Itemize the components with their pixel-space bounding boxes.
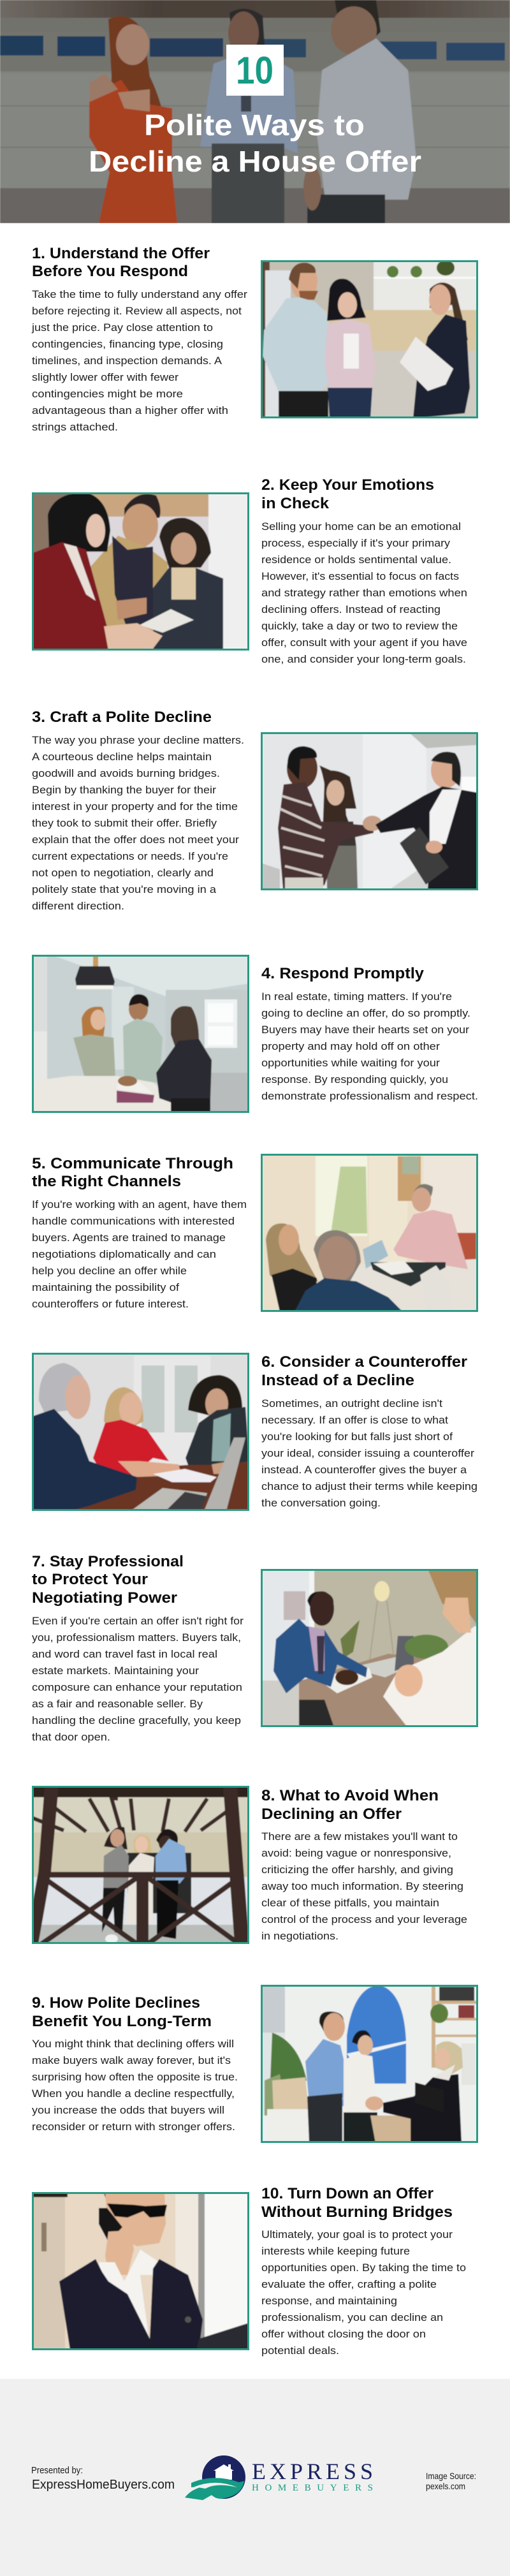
header photo: three people talking in front of a garage bbox=[0, 0, 510, 223]
text block: tip 2: However, it's essential to focus on facts bbox=[261, 571, 459, 582]
text block: tip 9: make buyers walk away forever, but it's bbox=[32, 2055, 231, 2066]
text block: tip 8: avoid: being vague or nonresponsive, bbox=[261, 1848, 451, 1859]
text block: tip 3: not open to negotiation, clearly and bbox=[32, 867, 214, 879]
text block: tip 7 bbox=[32, 1616, 244, 1743]
text block: tip 3: interest in your property and for the time bbox=[32, 801, 238, 813]
panel: tip 5 bbox=[32, 1154, 478, 1312]
heading: tip 6 bbox=[261, 1353, 467, 1389]
text block: tip 1 bbox=[31, 289, 248, 433]
photo: agent meeting a couple at a table bbox=[261, 1154, 478, 1312]
logo: Express HomeBuyers: EXPRESS bbox=[252, 2459, 373, 2484]
heading: tip 1 bbox=[32, 245, 210, 280]
text block: tip 8: control of the process and your leverage bbox=[261, 1914, 467, 1925]
text block: tip 5: counteroffers or future interest. bbox=[32, 1299, 189, 1310]
presented by credit: ExpressHomeBuyers.com bbox=[32, 2478, 175, 2492]
photo: handshake between agent and couple bbox=[261, 732, 478, 890]
heading: tip 9: Benefit You Long-Term bbox=[32, 2013, 212, 2030]
title: Decline a House Offer bbox=[89, 145, 421, 178]
text block: tip 4: demonstrate professionalism and respect. bbox=[261, 1091, 478, 1102]
text block: tip 10: response, and maintaining bbox=[261, 2295, 397, 2307]
text block: tip 5: negotiations diplomatically and can bbox=[32, 1249, 216, 1260]
panel: tip 3 bbox=[32, 709, 478, 912]
heading: tip 10: 10. Turn Down an Offer bbox=[261, 2185, 433, 2202]
text block: tip 9: reconsider or return with stronger offers. bbox=[32, 2121, 235, 2133]
heading: tip 10 bbox=[261, 2185, 453, 2221]
text block: tip 3: A courteous decline helps maintain bbox=[32, 751, 212, 763]
text block: tip 2: process, especially if it's your primary bbox=[261, 538, 451, 549]
panel: tip 10 bbox=[32, 2185, 466, 2357]
heading: tip 2: 2. Keep Your Emotions bbox=[261, 476, 434, 494]
heading: tip 10: Without Burning Bridges bbox=[261, 2204, 453, 2221]
text block: tip 3: Begin by thanking the buyer for their bbox=[32, 784, 217, 796]
heading: tip 7: to Protect Your bbox=[32, 1571, 148, 1588]
number badge: 10 bbox=[236, 49, 273, 92]
text block: tip 2: offer, consult with your agent if you have bbox=[261, 637, 467, 649]
text block: tip 10: potential deals. bbox=[261, 2345, 339, 2357]
panel: tip 4 bbox=[32, 955, 478, 1113]
presented by credit: Presented by: bbox=[31, 2466, 83, 2476]
panel: tip 1 bbox=[31, 245, 478, 433]
text block: tip 5: If you're working with an agent, have them bbox=[32, 1199, 247, 1211]
text block: tip 4: Buyers may have their hearts set on your bbox=[261, 1024, 470, 1036]
text block: tip 3: politely state that you're moving in a bbox=[32, 884, 217, 895]
text block: tip 7: composure can enhance your reputation bbox=[32, 1682, 242, 1693]
text block: tip 1: advantageous than a higher offer with bbox=[32, 405, 228, 416]
text block: tip 6: instead. A counteroffer gives the buyer a bbox=[261, 1464, 467, 1476]
text block: tip 3: The way you phrase your decline matters. bbox=[32, 735, 244, 746]
text block: tip 4 bbox=[261, 991, 478, 1102]
text block: tip 10: professionalism, you can decline an bbox=[261, 2312, 443, 2323]
heading: tip 4: 4. Respond Promptly bbox=[261, 965, 424, 982]
text block: tip 7: that door open. bbox=[32, 1732, 110, 1743]
text block: tip 2 bbox=[261, 521, 467, 665]
text block: tip 10: Ultimately, your goal is to protect your bbox=[261, 2229, 453, 2241]
text block: tip 2: and strategy rather than emotions when bbox=[261, 587, 467, 599]
heading: tip 7: Negotiating Power bbox=[32, 1589, 177, 1607]
text block: tip 7: you, professionalism matters. Buyers talk, bbox=[32, 1632, 241, 1644]
text block: tip 4: going to decline an offer, do so promptly. bbox=[261, 1008, 470, 1019]
heading: tip 2: in Check bbox=[261, 495, 329, 512]
text block: tip 10: offer without closing the door on bbox=[261, 2329, 426, 2340]
image source credit: Image Source: bbox=[426, 2471, 476, 2481]
text block: tip 8: in negotiations. bbox=[261, 1931, 339, 1942]
photo: agent with a couple in a kitchen bbox=[261, 260, 478, 418]
panel: tip 7 bbox=[32, 1553, 478, 1743]
text block: tip 9: When you handle a decline respectfully, bbox=[32, 2088, 235, 2100]
text block: tip 2: declining offers. Instead of reacting bbox=[261, 604, 441, 615]
text block: tip 4: response. By responding quickly, you bbox=[261, 1074, 448, 1086]
text block: tip 10: interests while keeping future bbox=[261, 2246, 410, 2257]
text block: tip 7: Even if you're certain an offer isn't right for bbox=[32, 1616, 244, 1627]
text block: tip 10: opportunities open. By taking the time to bbox=[261, 2262, 466, 2274]
text block: tip 5: buyers. Agents are trained to manage bbox=[32, 1232, 226, 1244]
image source credit: pexels.com bbox=[426, 2481, 465, 2491]
center man bbox=[229, 9, 265, 64]
heading: tip 7 bbox=[32, 1553, 184, 1607]
heading: tip 5 bbox=[32, 1155, 233, 1190]
text block: tip 8 bbox=[261, 1831, 467, 1942]
text block: tip 5: handle communications with interested bbox=[32, 1216, 235, 1227]
text block: tip 8: criticizing the offer harshly, and giving bbox=[261, 1864, 453, 1876]
text block: tip 1: before rejecting it. Review all aspects, not bbox=[32, 305, 242, 317]
text block: tip 6: chance to adjust their terms while keeping bbox=[261, 1481, 477, 1492]
text block: tip 2: Selling your home can be an emotional bbox=[261, 521, 461, 533]
heading: tip 6: Instead of a Decline bbox=[261, 1372, 414, 1389]
heading: tip 3: 3. Craft a Polite Decline bbox=[32, 709, 212, 726]
logo: Express HomeBuyers bbox=[185, 2455, 373, 2500]
photo: three people on a timber porch bbox=[32, 1786, 249, 1944]
header panel bbox=[0, 0, 510, 223]
text block: tip 4: opportunities while waiting for your bbox=[261, 1057, 441, 1069]
heading: tip 8: 8. What to Avoid When bbox=[261, 1787, 439, 1804]
image source credit bbox=[426, 2471, 476, 2491]
photo: businesswoman talking on the phone bbox=[32, 2192, 249, 2350]
woman bbox=[108, 17, 169, 191]
text block: tip 6 bbox=[261, 1398, 477, 1509]
panel: tip 9 bbox=[32, 1985, 478, 2143]
photo: businessman at a desk with a client bbox=[261, 1569, 478, 1727]
heading: tip 1: Before You Respond bbox=[32, 263, 188, 280]
text block: tip 1: just the price. Pay close attention to bbox=[31, 322, 213, 334]
panel: tip 6 bbox=[32, 1353, 477, 1511]
text block: tip 9: surprising how often the opposite is true. bbox=[32, 2072, 238, 2083]
heading: tip 2 bbox=[261, 476, 434, 512]
logo: Express HomeBuyers: HOMEBUYERS bbox=[252, 2483, 373, 2493]
text block: tip 6: necessary. If an offer is close to what bbox=[261, 1415, 448, 1426]
photo: three people reviewing a notebook bbox=[32, 492, 249, 651]
text block: tip 6: Sometimes, an outright decline isn't bbox=[261, 1398, 442, 1409]
number badge bbox=[226, 45, 284, 96]
title bbox=[89, 108, 421, 178]
text block: tip 3: explain that the offer does not meet your bbox=[32, 834, 240, 846]
text block: tip 4: In real estate, timing matters. If you're bbox=[261, 991, 452, 1003]
text block: tip 1: contingencies might be more bbox=[32, 388, 183, 400]
text block: tip 10: evaluate the offer, crafting a polite bbox=[261, 2279, 437, 2290]
text block: tip 6: you're looking for but falls just short of bbox=[261, 1431, 453, 1443]
text block: tip 9: you increase the odds that buyers will bbox=[32, 2105, 224, 2116]
text block: tip 1: contingencies, financing type, closing bbox=[32, 339, 223, 350]
photo: three people at a table with a laptop bbox=[32, 1353, 249, 1511]
text block: tip 8: clear of these pitfalls, you maintain bbox=[261, 1897, 439, 1909]
heading: tip 8: Declining an Offer bbox=[261, 1806, 402, 1823]
text block: tip 2: one, and consider your long-term goals. bbox=[261, 654, 466, 665]
text block: tip 5 bbox=[32, 1199, 247, 1310]
text block: tip 1: strings attached. bbox=[32, 422, 118, 433]
text block: tip 5: maintaining the possibility of bbox=[32, 1282, 179, 1293]
text block: tip 5: help you decline an offer while bbox=[32, 1265, 187, 1277]
heading: tip 6: 6. Consider a Counteroffer bbox=[261, 1353, 467, 1371]
text block: tip 7: handling the decline gracefully, you keep bbox=[32, 1715, 241, 1726]
presented by credit bbox=[31, 2466, 175, 2492]
heading: tip 9 bbox=[32, 1994, 212, 2030]
text block: tip 3: goodwill and avoids burning bridges. bbox=[32, 768, 220, 779]
heading: tip 5: the Right Channels bbox=[32, 1173, 181, 1190]
text block: tip 10 bbox=[261, 2229, 466, 2357]
text block: tip 3: they took to submit their offer. Briefly bbox=[32, 818, 217, 829]
text block: tip 1: slightly lower offer with fewer bbox=[32, 372, 179, 383]
text block: tip 9: You might think that declining offers will bbox=[32, 2038, 234, 2050]
right man bbox=[335, 0, 381, 54]
panel: tip 8 bbox=[26, 1786, 467, 1944]
text block: tip 1: timelines, and inspection demands. A bbox=[32, 355, 222, 367]
photo: couple shaking hands with agent in a bright room bbox=[261, 1985, 478, 2143]
heading: tip 1: 1. Understand the Offer bbox=[32, 245, 210, 262]
photo: three people at a kitchen counter bbox=[32, 955, 249, 1113]
text block: tip 6: your ideal, consider issuing a counteroffer bbox=[261, 1448, 475, 1459]
footer panel bbox=[0, 2379, 510, 2576]
heading: tip 9: 9. How Polite Declines bbox=[32, 1994, 200, 2012]
text block: tip 4: property and may hold off on other bbox=[261, 1041, 441, 1052]
heading: tip 7: 7. Stay Professional bbox=[32, 1553, 184, 1570]
text block: tip 7: and word can travel fast in local real bbox=[32, 1649, 217, 1660]
text block: tip 3: current expectations or needs. If you're bbox=[32, 851, 228, 862]
text block: tip 8: There are a few mistakes you'll want to bbox=[261, 1831, 458, 1843]
heading: tip 5: 5. Communicate Through bbox=[32, 1155, 233, 1172]
heading: tip 8 bbox=[261, 1787, 439, 1823]
text block: tip 3: different direction. bbox=[32, 901, 124, 912]
text block: tip 8: away too much information. By steering bbox=[261, 1881, 463, 1892]
text block: tip 9 bbox=[32, 2038, 238, 2133]
text block: tip 3 bbox=[32, 735, 244, 912]
title: Polite Ways to bbox=[144, 108, 365, 142]
panel: tip 2 bbox=[32, 476, 467, 665]
text block: tip 7: estate markets. Maintaining your bbox=[32, 1665, 200, 1677]
text block: tip 2: quickly, take a day or two to review the bbox=[261, 621, 458, 632]
text block: tip 2: residence or holds sentimental value. bbox=[261, 554, 451, 566]
text block: tip 6: the conversation going. bbox=[261, 1498, 381, 1509]
text block: tip 7: as a fair and reasonable seller. By bbox=[32, 1698, 203, 1710]
text block: tip 1: Take the time to fully understand any offer bbox=[32, 289, 248, 300]
